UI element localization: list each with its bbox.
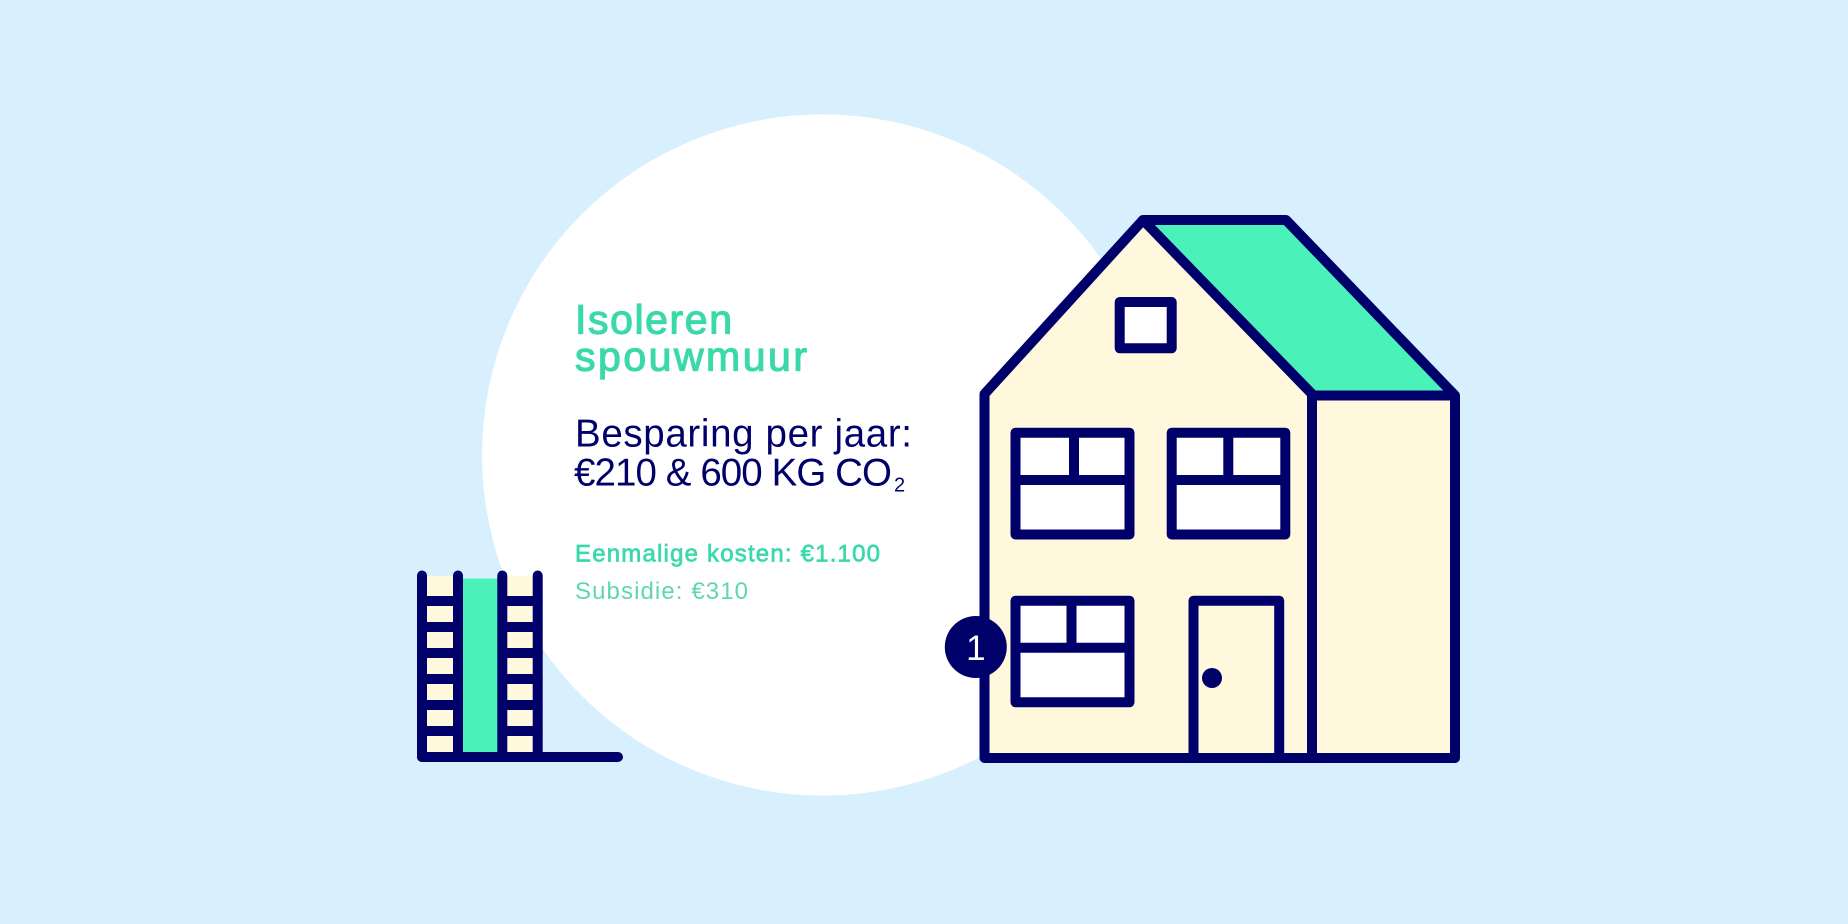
number badge: 1: [966, 629, 986, 668]
savings per year: €210 & 600 KG CO: [574, 452, 892, 495]
icon: cavity wall cross-section: [422, 576, 618, 757]
text block: [574, 296, 912, 605]
house walls: [984, 220, 1312, 758]
icon: house: [984, 220, 1455, 758]
brick rungs and frame: [422, 576, 618, 757]
upper right window: [1172, 433, 1285, 534]
door: [1194, 601, 1279, 758]
title: [575, 296, 807, 380]
white circle backdrop: [482, 114, 1163, 796]
one-off costs: Eenmalige kosten: €1.100: [575, 541, 880, 568]
attic window: [1120, 302, 1172, 348]
savings per year: 2: [894, 475, 905, 497]
title: spouwmuur: [575, 334, 807, 380]
house outline: [984, 220, 1455, 758]
savings per year: Besparing per jaar:: [575, 413, 912, 456]
upper left window: [1016, 433, 1130, 534]
side extension wall: [1312, 395, 1455, 758]
title: Isoleren: [575, 296, 732, 342]
door knob: [1202, 668, 1222, 688]
lower window: [1016, 601, 1130, 702]
wall fills: [426, 576, 534, 753]
roof panel: [1143, 220, 1455, 396]
subsidy: Subsidie: €310: [575, 578, 748, 605]
savings per year: [574, 413, 912, 497]
number badge: [945, 616, 1007, 678]
